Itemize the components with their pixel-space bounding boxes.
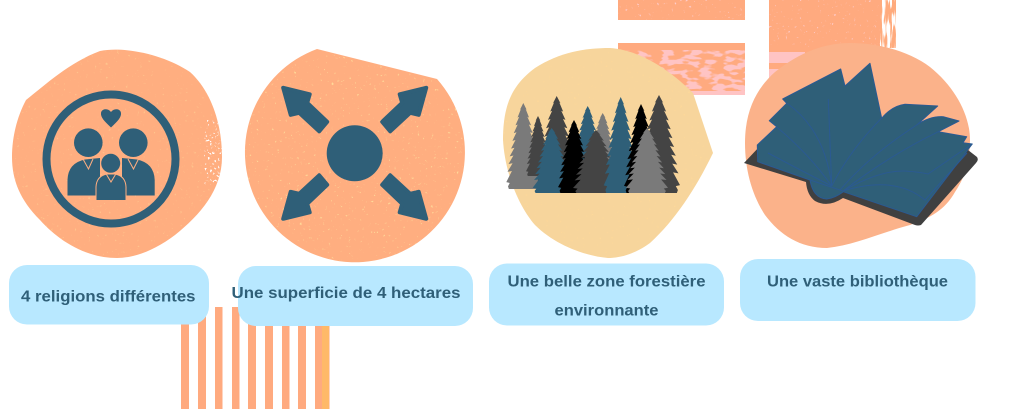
label text: Une vaste bibliothèque xyxy=(767,274,948,290)
orange blob xyxy=(745,43,970,248)
icon: fir trees xyxy=(506,95,680,193)
panel: forêt xyxy=(500,46,716,260)
label pill: bibliothèque xyxy=(740,259,976,321)
yellow blob xyxy=(500,46,716,260)
book pages xyxy=(757,63,972,217)
background block: top bar xyxy=(618,0,745,20)
label pill: forêt xyxy=(489,264,724,326)
book cover xyxy=(744,146,978,226)
orange blob xyxy=(10,49,224,260)
icon: open book xyxy=(744,63,978,225)
background block: streaked bar xyxy=(618,43,745,95)
background stripes xyxy=(181,307,330,409)
label pill: superficie xyxy=(232,266,473,326)
panel: superficie xyxy=(242,47,468,267)
page lines xyxy=(768,99,972,200)
background block: large square xyxy=(769,0,896,85)
label text: Une belle zone forestière xyxy=(508,274,706,290)
panel: religions xyxy=(10,49,224,260)
label text: 4 religions différentes xyxy=(21,288,196,306)
icon: family in a circle xyxy=(46,94,176,224)
icon: four outward arrows xyxy=(283,88,426,219)
label text second line: environnante xyxy=(554,302,659,320)
label text: Une superficie de 4 hectares xyxy=(232,285,461,302)
panel: bibliothèque xyxy=(744,43,978,248)
orange cut circle xyxy=(242,47,468,267)
label pill: religions xyxy=(9,265,209,324)
